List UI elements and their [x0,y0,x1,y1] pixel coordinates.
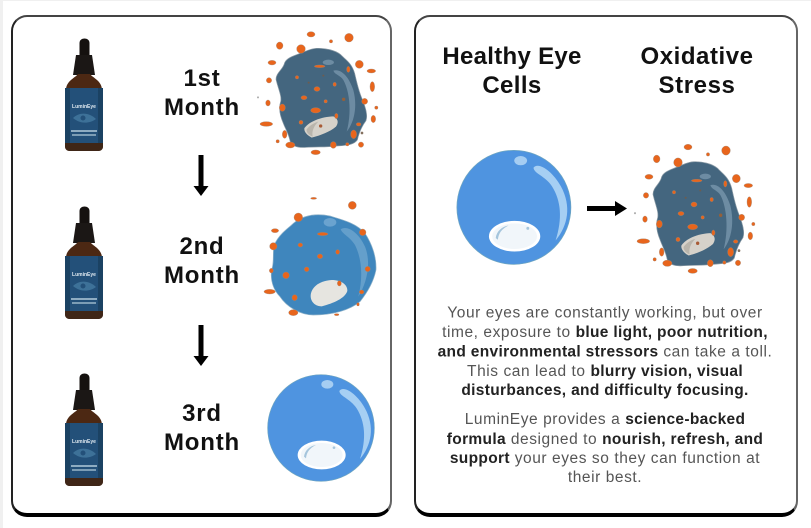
illustration: heavily damaged cell [257,32,378,155]
heading: Healthy Eye Cells: Healthy Eye [442,43,582,70]
bottle: third month: LuminEye [72,439,96,445]
text block: eye strain explanation: disturbances, and difficulty focusing. [461,382,749,399]
heading: Oxidative Stress: Stress [659,72,735,99]
label: 3rd Month: Month [164,429,240,456]
panel: monthly progress [11,15,392,517]
panel: healthy cells vs oxidative stress [414,15,798,517]
arrow: down to third month [194,325,208,366]
text block: LuminEye formula: formula designed to nourish, refresh, and [447,431,763,448]
illustration: healthy cell, third month [268,375,374,481]
label: 1st Month: Month [164,94,240,121]
text block: LuminEye formula: LuminEye provides a science-backed [465,411,745,428]
text block: LuminEye formula [447,411,763,486]
text block: eye strain explanation: and environmental stressors can take a toll. [438,344,772,360]
bottle: first month [65,38,103,151]
label: 3rd Month: 3rd [182,400,222,427]
text block: eye strain explanation: This can lead to blurry vision, visual [467,363,743,380]
text block: LuminEye formula: their best. [568,469,642,486]
text block: eye strain explanation [438,304,772,399]
text block: eye strain explanation: Your eyes are constantly working, but over [447,304,763,322]
text block: LuminEye formula: support your eyes so they can function at [450,450,760,467]
label: 1st Month: 1st [183,65,221,92]
label: 2nd Month: Month [164,262,240,289]
heading: Healthy Eye Cells: Cells [482,72,542,99]
illustration: oxidative stress cell [634,144,755,273]
bottle: second month [65,206,103,319]
heading: Oxidative Stress: Oxidative [640,43,754,70]
bottle: third month [65,374,103,486]
arrow: healthy to stressed [587,201,627,216]
label: 2nd Month: 2nd [179,233,225,260]
text block: eye strain explanation: time, exposure to blue light, poor nutrition, [442,324,768,341]
bottle: second month: LuminEye [72,272,96,278]
bottle: first month: LuminEye [72,104,96,110]
illustration: healthy eye cell [457,150,571,264]
illustration: recovering cell [264,197,376,316]
arrow: down to second month [194,155,208,196]
